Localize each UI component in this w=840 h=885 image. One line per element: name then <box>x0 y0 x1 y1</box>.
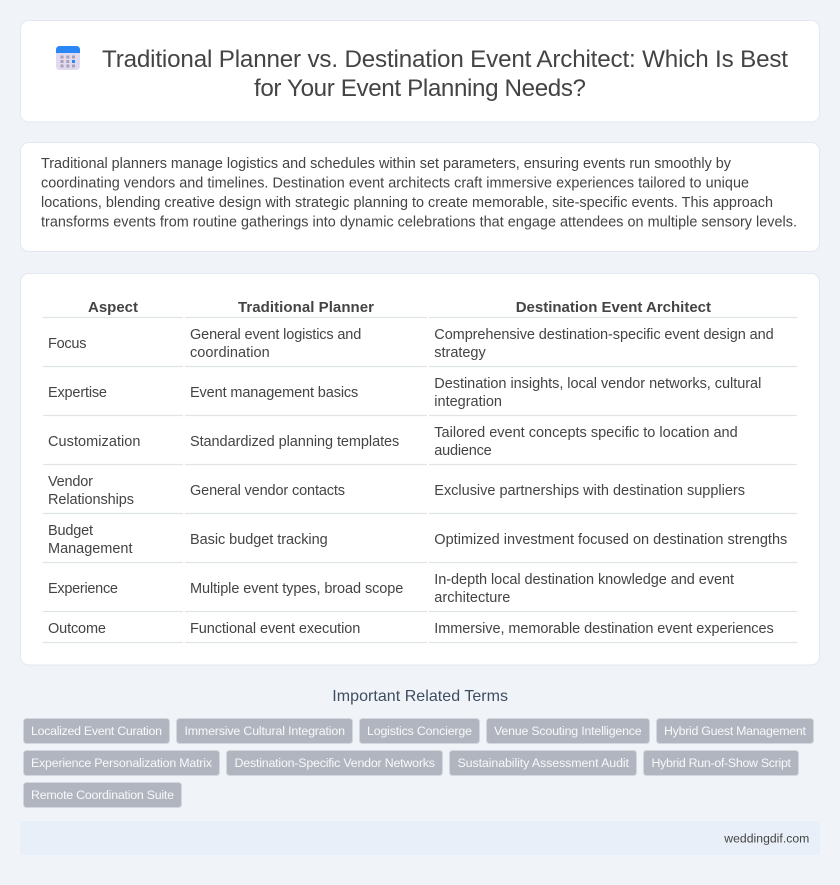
tag <box>656 718 814 744</box>
title <box>102 46 788 102</box>
row: outcome <box>48 621 774 637</box>
tag: Experience Personalization Matrix <box>31 756 213 770</box>
row: customization: Customization <box>48 434 140 450</box>
intro paragraph: coordinating vendors and timelines. Destination event architects craft immersive experiences tailored to unique <box>41 176 749 192</box>
row: focus <box>48 327 774 361</box>
row: budget management: Budget <box>48 523 93 539</box>
row: focus: Comprehensive destination-specific event design and <box>434 327 774 343</box>
row: focus: Focus <box>48 336 86 352</box>
row: vendor relationships <box>48 474 745 508</box>
row: expertise: Destination insights, local vendor networks, cultural <box>434 376 761 392</box>
tag: Logistics Concierge <box>367 724 472 738</box>
panel: comparison table <box>20 274 820 665</box>
row: vendor relationships: General vendor contacts <box>190 483 345 499</box>
row: experience <box>48 572 734 606</box>
panel: title header <box>20 20 820 122</box>
row: focus: strategy <box>434 345 486 361</box>
row: expertise: integration <box>434 394 502 410</box>
tag: Immersive Cultural Integration <box>184 724 345 738</box>
tag: Remote Coordination Suite <box>31 788 174 802</box>
tag: Hybrid Run-of-Show Script <box>652 756 792 770</box>
tag <box>644 750 798 776</box>
tag: Hybrid Guest Management <box>664 724 807 738</box>
row: experience: architecture <box>434 590 510 606</box>
tag list <box>24 718 814 808</box>
row: budget management: Management <box>48 541 132 557</box>
row: outcome: Functional event execution <box>190 621 360 637</box>
row: expertise: Expertise <box>48 385 107 401</box>
tag <box>486 718 650 744</box>
row: customization: Standardized planning templates <box>190 434 399 450</box>
tag <box>450 750 636 776</box>
row: vendor relationships: Vendor <box>48 474 93 490</box>
row: focus: General event logistics and <box>190 327 361 343</box>
tag <box>24 718 170 744</box>
tag: Destination-Specific Vendor Networks <box>234 756 435 770</box>
row: customization <box>48 425 738 459</box>
row: expertise <box>48 376 761 410</box>
row: vendor relationships: Relationships <box>48 492 134 508</box>
row: outcome: Immersive, memorable destination event experiences <box>434 621 774 637</box>
tag <box>226 750 442 776</box>
tag: Venue Scouting Intelligence <box>494 724 642 738</box>
row: experience: Multiple event types, broad scope <box>190 581 403 597</box>
footer bar: weddingdif.com <box>723 831 809 845</box>
table header row: Destination Event Architect <box>516 299 711 316</box>
row: customization: Tailored event concepts specific to location and <box>434 425 738 441</box>
intro paragraph: transforms events from routine gatherings into dynamic celebrations that engage attendees on multiple sensory levels. <box>41 214 797 230</box>
table header row: Traditional Planner <box>238 299 374 316</box>
row: experience: In-depth local destination knowledge and event <box>434 572 734 588</box>
intro paragraph: Traditional planners manage logistics and schedules within set parameters, ensuring events run smoothly by <box>41 156 732 172</box>
row: budget management <box>48 523 787 557</box>
panel: introduction <box>20 142 820 252</box>
row: budget management: Optimized investment focused on destination strengths <box>434 532 787 548</box>
row: outcome: Outcome <box>48 621 106 637</box>
intro paragraph <box>41 156 797 230</box>
tag: Sustainability Assessment Audit <box>458 756 630 770</box>
tag: Localized Event Curation <box>31 724 162 738</box>
tag <box>176 718 352 744</box>
heading: important related terms: Important Related Terms <box>332 688 508 705</box>
footer bar <box>20 821 820 855</box>
row: experience: Experience <box>48 581 118 597</box>
row: focus: coordination <box>190 345 270 361</box>
row: budget management: Basic budget tracking <box>190 532 328 548</box>
row: expertise: Event management basics <box>190 385 358 401</box>
tag <box>360 718 480 744</box>
table header row <box>88 299 711 316</box>
title: for Your Event Planning Needs? <box>254 75 586 102</box>
table header row: Aspect <box>88 299 138 316</box>
tag <box>24 750 220 776</box>
tag <box>24 782 182 808</box>
row: customization: audience <box>434 443 492 459</box>
icon: calendar <box>56 46 80 70</box>
row: vendor relationships: Exclusive partnerships with destination suppliers <box>434 483 745 499</box>
title: Traditional Planner vs. Destination Event Architect: Which Is Best <box>102 46 788 73</box>
intro paragraph: locations, blending creative design with strategic planning to create memorable, site-specific events. This approach <box>41 195 773 211</box>
